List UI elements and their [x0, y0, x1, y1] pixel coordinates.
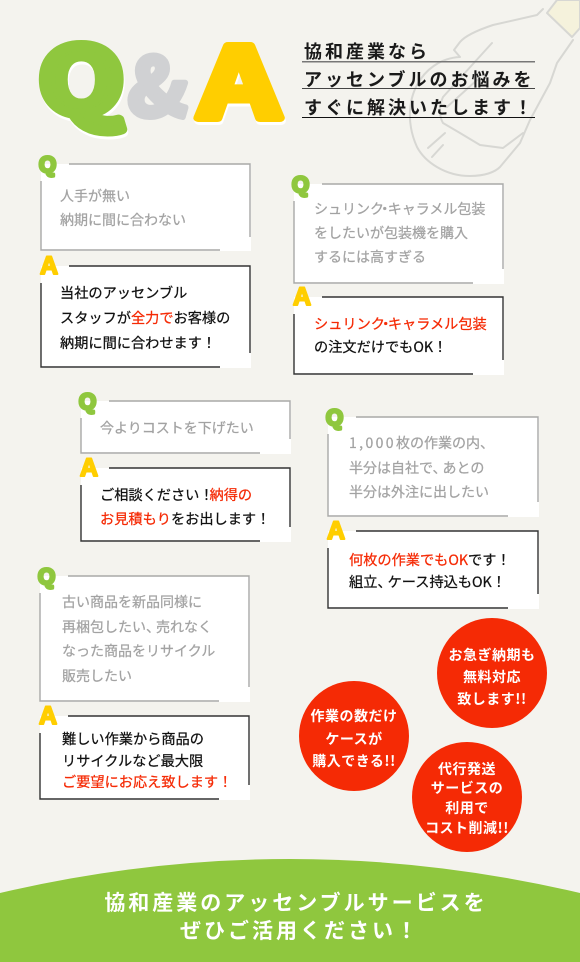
callout: shipping service: 利用で	[445, 798, 489, 818]
question text: をしたいが包装機を購入	[314, 223, 468, 243]
footer text: ぜひご活用ください！	[180, 915, 420, 945]
panel: answer 5	[39, 702, 250, 800]
question text	[349, 433, 494, 502]
panel: question 5	[38, 564, 250, 702]
footer text	[104, 887, 488, 945]
question text: なった商品をリサイクル	[62, 641, 215, 661]
footer banner	[0, 859, 580, 962]
panel: question 2	[292, 172, 504, 284]
question text: 販売したい	[62, 666, 132, 686]
panel: question 3	[79, 389, 291, 454]
callout: buy cases: 購入できる!!	[312, 751, 396, 771]
heading: tagline	[302, 38, 535, 120]
icon: Q: Q	[39, 152, 56, 177]
icon: A: A	[293, 283, 311, 311]
icon: Q: Q	[79, 389, 96, 414]
question text	[62, 592, 215, 686]
answer text: 何枚の作業でもOKです！	[349, 550, 511, 570]
heading: tagline: アッセンブルのお悩みを	[304, 66, 534, 92]
footer text: 協和産業のアッセンブルサービスを	[104, 887, 488, 917]
answer text: ご要望にお応え致します！	[62, 772, 232, 792]
heading: Q&A logo	[39, 6, 282, 150]
callout: rush delivery: 無料対応	[463, 667, 521, 687]
answer text: スタッフが全力でお客様の	[60, 308, 230, 328]
callout: shipping service: 代行発送	[438, 759, 496, 779]
heading: Q&A logo: A	[198, 6, 281, 147]
question text: 半分は外注に出したい	[349, 482, 489, 502]
question text: 古い商品を新品同様に	[62, 592, 202, 612]
icon: Q: Q	[326, 405, 343, 430]
answer text	[349, 550, 511, 592]
answer text: ご相談ください！納得の	[100, 485, 252, 505]
callout: rush delivery: 致します!!	[457, 689, 527, 709]
icon: Q: Q	[292, 172, 309, 197]
heading: tagline: 協和産業なら	[304, 38, 430, 64]
question text: するには高すぎる	[314, 247, 426, 267]
heading: Q&A logo: &	[128, 24, 187, 140]
question text	[314, 199, 485, 267]
question text: 人手が無い	[60, 186, 130, 206]
answer text	[62, 729, 232, 792]
heading: tagline: すぐに解決いたします！	[304, 94, 535, 120]
question text: シュリンク・キャラメル包装	[314, 199, 485, 219]
panel: question 1	[39, 152, 251, 251]
heading: Q&A logo: Q	[39, 9, 124, 139]
answer text: 当社のアッセンブル	[60, 283, 187, 303]
question text	[60, 186, 186, 230]
panel: answer 1	[40, 252, 251, 368]
answer text	[60, 283, 230, 353]
answer text: リサイクルなど最大限	[62, 751, 203, 771]
callout: shipping service: サービスの	[431, 778, 503, 798]
callout: buy cases: 作業の数だけ	[310, 706, 398, 726]
answer text	[314, 314, 487, 357]
callout: shipping service	[412, 742, 522, 852]
callout: rush delivery: お急ぎ納期も	[448, 645, 536, 665]
heading: Q&A logo: Q	[40, 12, 125, 142]
answer text: お見積もりをお出します！	[100, 509, 270, 529]
answer text: シュリンク・キャラメル包装	[314, 314, 487, 334]
icon: A: A	[327, 517, 345, 545]
callout: shipping service: コスト削減!!	[425, 818, 509, 838]
question text: 半分は自社で、あとの	[349, 458, 484, 478]
panel: answer 2	[293, 283, 504, 375]
panel: answer 4	[327, 517, 539, 609]
answer text	[100, 485, 270, 529]
answer text: の注文だけでもOK！	[314, 337, 447, 357]
icon: A: A	[40, 252, 58, 280]
panel: answer 3	[80, 454, 291, 542]
icon: A: A	[80, 454, 98, 482]
panel: question 4	[326, 405, 539, 517]
callout: buy cases	[299, 681, 409, 791]
icon: A: A	[39, 702, 57, 730]
answer text: 難しい作業から商品の	[62, 729, 204, 749]
answer text: 納期に間に合わせます！	[60, 333, 216, 353]
question text: 再梱包したい、売れなく	[62, 617, 212, 637]
callout: buy cases: ケースが	[325, 729, 383, 749]
icon: Q: Q	[38, 564, 55, 589]
answer text: 組立、ケース持込もOK！	[349, 572, 506, 592]
question text: 今よりコストを下げたい	[100, 418, 254, 438]
callout: rush delivery	[437, 618, 547, 728]
question text: 1,000枚の作業の内、	[349, 433, 494, 453]
question text: 納期に間に合わない	[60, 210, 186, 230]
heading: Q&A logo: A	[199, 9, 282, 150]
icon: light bulb background	[410, 0, 580, 176]
